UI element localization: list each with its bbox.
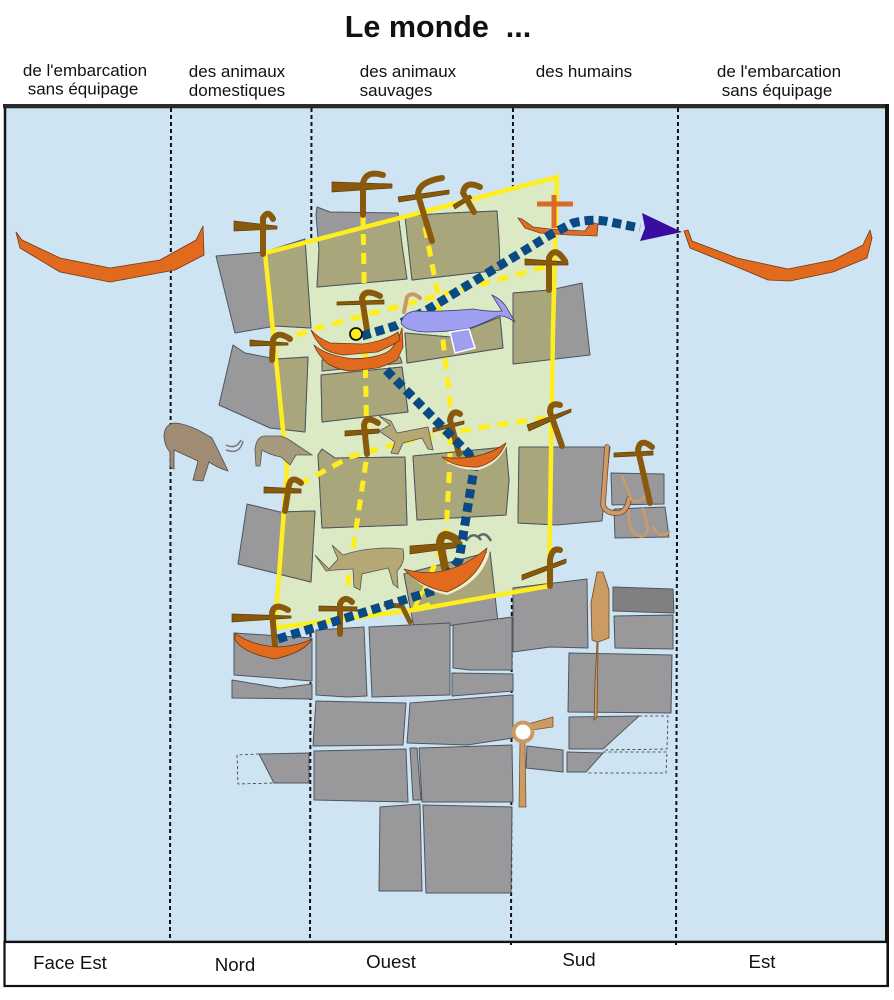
heading: de l'embarcation (right): sans équipage — [722, 81, 832, 100]
human figures — [232, 174, 653, 645]
panel: footer row — [4, 942, 888, 986]
heading: des humains: des humains — [536, 62, 632, 81]
footer label: Ouest: Ouest — [366, 951, 417, 972]
boat: left, no crew — [16, 226, 204, 282]
figure 12 — [614, 443, 653, 503]
footer label: Sud: Sud — [562, 949, 596, 970]
figure 10 — [433, 412, 464, 454]
dashed outlines of missing slabs — [237, 716, 668, 784]
sledge figure, orange — [518, 195, 598, 236]
figure 7 — [337, 292, 384, 330]
yellow zone outline — [265, 177, 557, 628]
horns — [466, 534, 491, 541]
figure 16 — [232, 607, 291, 645]
title: Le monde ... — [345, 10, 531, 44]
whale — [401, 295, 515, 353]
boat: lower of the pair — [314, 328, 403, 371]
yellow dashed grid — [290, 215, 546, 609]
ring figure — [514, 717, 553, 807]
figure 15 — [522, 549, 566, 586]
animal: goat — [379, 416, 433, 454]
footer label: Face Est: Face Est — [33, 952, 108, 973]
heading: des animaux domestiques: domestiques — [189, 81, 285, 100]
heading: des animaux sauvages: sauvages — [360, 81, 432, 100]
figure 17 — [319, 599, 357, 634]
top edge — [3, 104, 888, 108]
figure 9 — [345, 419, 379, 454]
route: blue dotted line — [278, 220, 640, 639]
boat: middle — [442, 443, 506, 467]
heading: des animaux domestiques: des animaux — [189, 62, 285, 81]
figure 6 — [525, 252, 568, 290]
animal: second quadruped — [255, 436, 312, 466]
animal: boar — [164, 423, 243, 481]
figure 11 — [527, 404, 571, 446]
heading: de l'embarcation (left): sans équipage — [28, 80, 138, 98]
boat: upper of the pair — [311, 330, 400, 355]
figure 14 — [410, 535, 462, 568]
footer label: Nord: Nord — [215, 954, 255, 975]
figure 8 — [250, 335, 290, 360]
dark slab — [613, 587, 674, 613]
figure 1 — [234, 214, 277, 254]
arrow head — [640, 213, 682, 241]
rock slabs inside zone — [268, 210, 552, 608]
figure 13 — [264, 479, 301, 511]
rock slabs — [216, 207, 673, 893]
figure 4 — [453, 185, 480, 212]
zone: green quadrilateral — [265, 177, 557, 628]
boat: bottom left — [235, 633, 312, 659]
footer label: Est: Est — [748, 951, 776, 972]
ropes — [603, 447, 669, 536]
boat: big — [404, 548, 487, 592]
animal: ox — [315, 545, 404, 590]
paddle — [591, 572, 609, 720]
right edge — [885, 104, 889, 987]
figure 3 — [398, 178, 449, 241]
figure 18 — [386, 605, 410, 622]
column separators — [170, 108, 678, 946]
figure 2 — [332, 174, 392, 215]
boats with crew — [311, 328, 507, 595]
heading: de l'embarcation (left): de l'embarcation — [23, 61, 147, 80]
small figure beside the whale — [404, 294, 420, 312]
boat: right, no crew — [684, 230, 872, 281]
start point, yellow — [350, 328, 362, 340]
heading: de l'embarcation (right): de l'embarcation — [717, 62, 841, 81]
boat: middle halo — [444, 445, 507, 470]
boat: big halo — [406, 550, 490, 595]
heading: des animaux sauvages: des animaux — [360, 62, 456, 81]
